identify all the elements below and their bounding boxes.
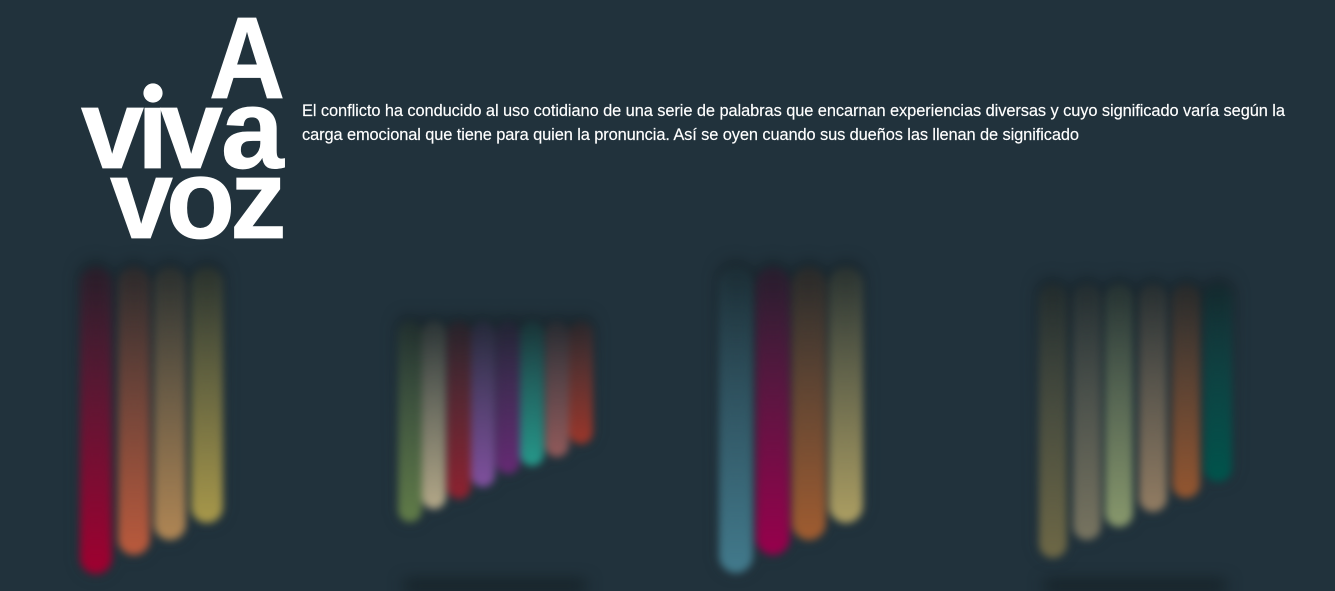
intro text: carga emocional que tiene para quien la pronuncia. Así se oyen cuando sus dueños las llenan de significado [302, 126, 1079, 144]
next row bars, cut off at the bottom edge [404, 581, 1226, 591]
bar 4 [829, 267, 863, 523]
bar 4 [191, 267, 223, 523]
bar 2 [1073, 284, 1101, 540]
panel: word 4 bars [1038, 279, 1233, 558]
bar 8 [569, 321, 593, 444]
bar 3 [447, 321, 471, 499]
title [81, 0, 286, 262]
bar 2 [118, 267, 150, 555]
bar 2 [422, 321, 446, 509]
bar 2 [756, 267, 790, 555]
bar 6 [1204, 284, 1232, 482]
intro text: El conflicto ha conducido al uso cotidiano de una serie de palabras que encarnan experiencias diversas y cuyo significado varía según la [302, 102, 1286, 120]
bar 1 [398, 321, 422, 522]
bar 3 [154, 267, 186, 540]
panel: word 1 bars [80, 262, 223, 575]
panel: word 3 bars [719, 262, 863, 573]
bar 4 [471, 321, 495, 487]
bar 5 [496, 321, 520, 474]
bar 7 [545, 321, 569, 457]
bar 1 [80, 267, 112, 574]
bar 1 [1039, 284, 1067, 558]
title: viva [81, 66, 285, 192]
bar 1 [719, 267, 753, 573]
panel: word 2 bars [398, 316, 593, 523]
intro text [302, 102, 1286, 144]
bar 6 [520, 321, 544, 466]
bar 4 [1139, 284, 1167, 512]
title: voz [110, 136, 286, 262]
bar 5 [1172, 284, 1200, 498]
bar 3 [1105, 284, 1133, 527]
bar 3 [792, 267, 826, 540]
